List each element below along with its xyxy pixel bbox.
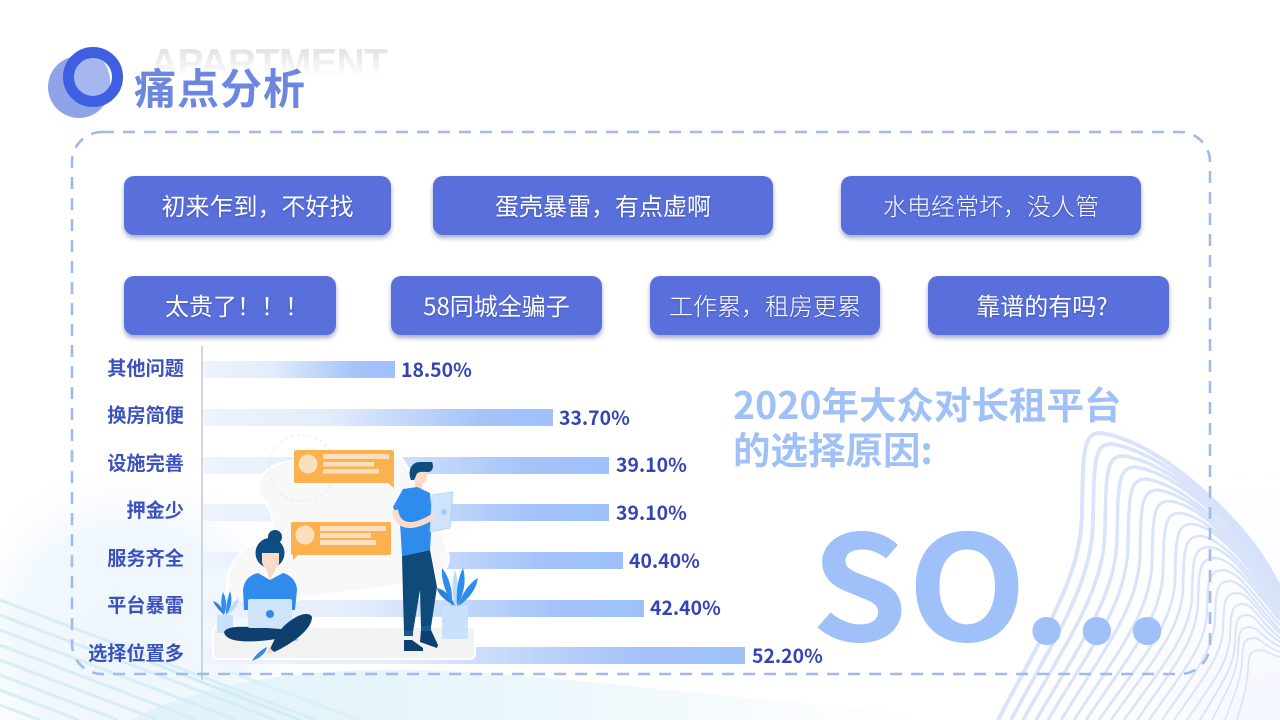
chart heading: 的选择原因: [733, 420, 933, 475]
big text: SO...: ... [1021, 474, 1172, 686]
bar row: 其他问题 [107, 353, 472, 383]
title: 痛点分析 [134, 56, 306, 117]
bar row: 选择位置多: 选择位置多 [88, 638, 184, 666]
bar row: 平台暴雷: 平台暴雷 [107, 590, 184, 618]
bar row: 服务齐全: 40.40% [629, 545, 700, 574]
button: 水电经常坏 [841, 176, 1141, 235]
plant left [213, 591, 239, 633]
bar row: 平台暴雷 [107, 590, 721, 621]
bar row: 服务齐全: 服务齐全 [107, 543, 184, 571]
button: 58同城 [391, 276, 602, 335]
button: 蛋壳暴雷: 蛋壳暴雷，有点虚啊 [495, 187, 711, 222]
bar row: 设施完善: 39.10% [616, 449, 687, 478]
button: 蛋壳暴雷 [433, 176, 773, 235]
button: 工作累: 工作累，租房更累 [669, 287, 861, 322]
man with tablet [393, 462, 453, 651]
chart heading [733, 375, 1122, 475]
button: 58同城: 58同城全骗子 [423, 287, 570, 322]
bar row: 选择位置多 [88, 638, 823, 669]
button: 初来乍到 [124, 176, 391, 235]
chart heading: 2020年大众对长租平台 [733, 375, 1122, 430]
button: 太贵了: 太贵了！！！ [165, 287, 309, 322]
button: 水电经常坏: 水电经常坏，没人管 [883, 187, 1099, 222]
bar row: 其他问题: 其他问题 [107, 353, 184, 381]
bar row: 押金少 [126, 495, 687, 526]
woman with laptop [224, 530, 312, 661]
chat bubble 1 [294, 450, 394, 488]
bar row: 押金少: 押金少 [126, 495, 184, 523]
chat bubble 2 [291, 522, 391, 560]
pain point buttons [121, 176, 1172, 341]
big text: SO...: SO [811, 472, 1027, 684]
bar row: 平台暴雷: 42.40% [650, 592, 721, 621]
bar row: 换房简便 [107, 400, 630, 431]
button: 靠谱的: 靠谱的有吗? [976, 287, 1108, 322]
bar row: 押金少: 39.10% [616, 497, 687, 526]
backdrop blob [227, 456, 449, 600]
bar row: 服务齐全 [107, 543, 700, 574]
dashed circle [269, 435, 335, 501]
heading watermark: APARTMENT: APARTMENT [150, 42, 388, 85]
floor platform [213, 627, 475, 659]
bar row: 换房简便: 换房简便 [107, 400, 184, 428]
button: 太贵了 [124, 276, 336, 335]
bar row: 选择位置多: 52.20% [752, 640, 823, 669]
button: 初来乍到: 初来乍到，不好找 [162, 187, 354, 222]
plant right [437, 568, 478, 639]
bar row: 设施完善 [107, 448, 687, 478]
button: 靠谱的 [928, 276, 1169, 335]
bar row: 换房简便: 33.70% [559, 402, 630, 431]
bar row: 其他问题: 18.50% [401, 354, 472, 383]
button: 工作累 [650, 276, 880, 335]
bar row: 设施完善: 设施完善 [107, 448, 184, 476]
